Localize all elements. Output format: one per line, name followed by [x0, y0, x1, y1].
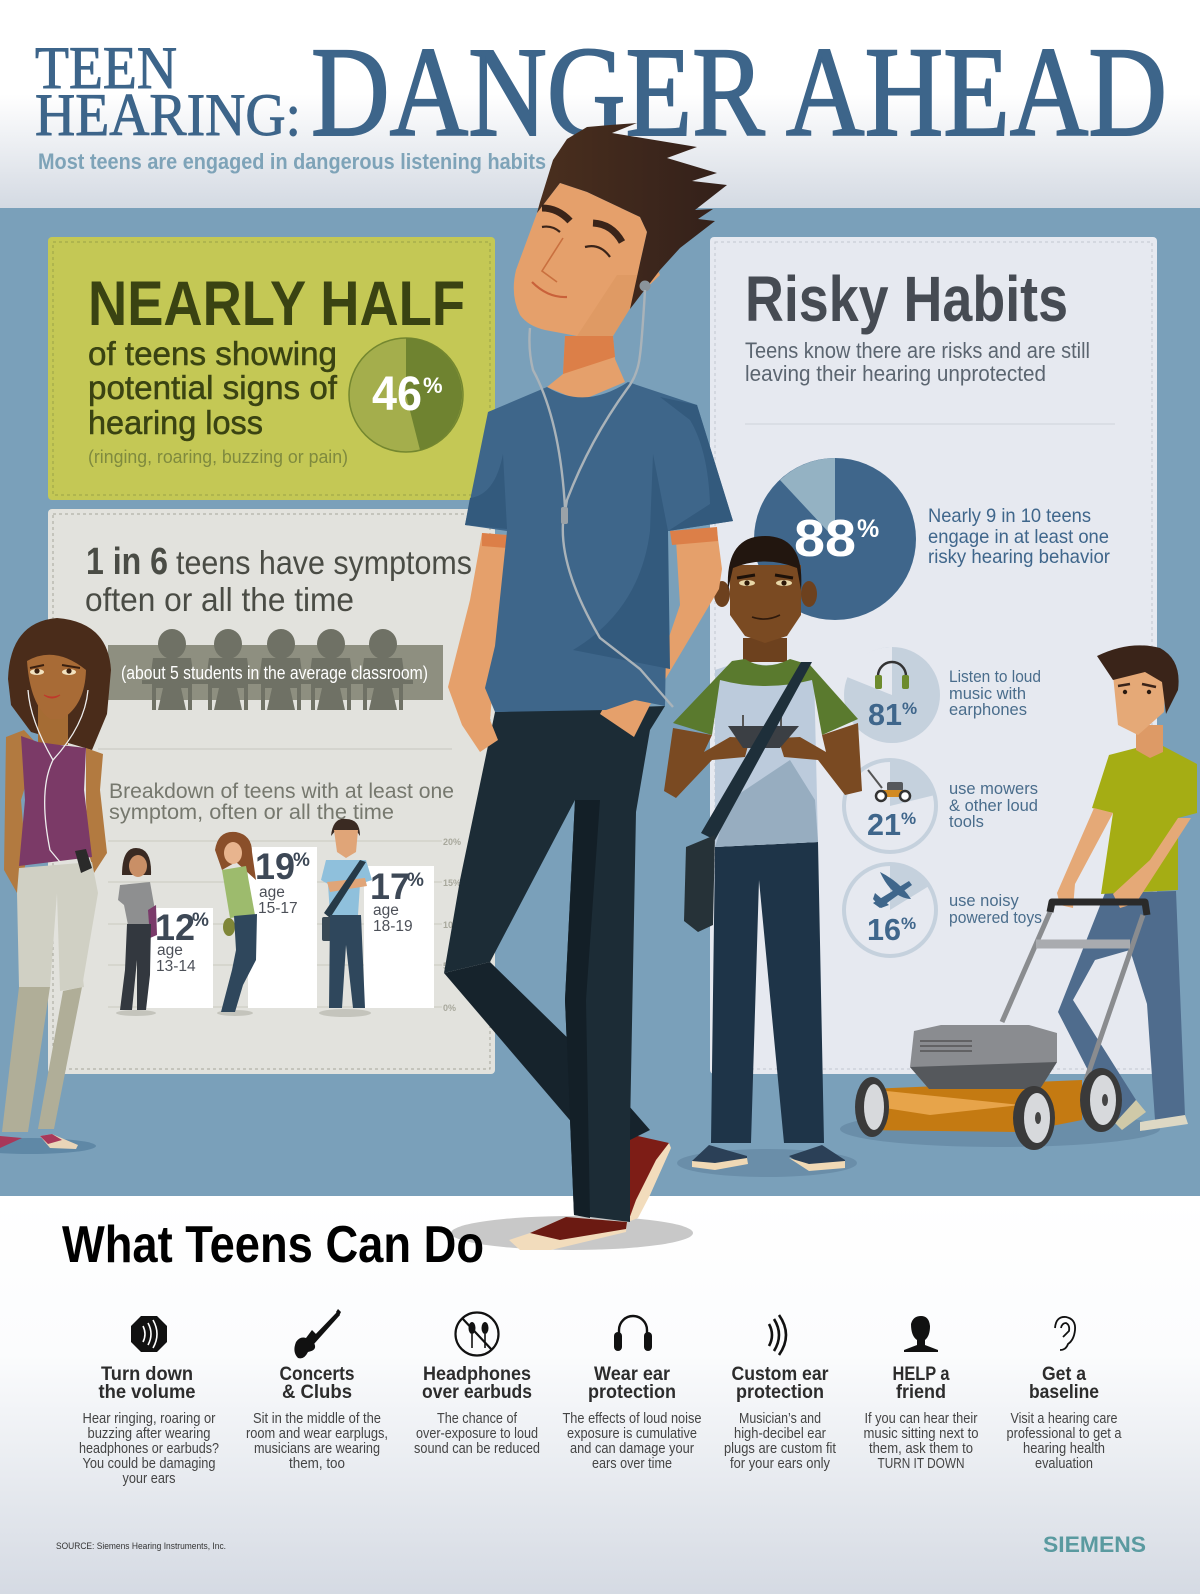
figure: girl 15-17 — [215, 832, 257, 1016]
pie chart: 46%: 46 — [372, 368, 422, 421]
figure: boy 18-19 — [319, 819, 372, 1017]
tip: get a baseline: hearing health — [1023, 1441, 1105, 1457]
bar: age 13-14: 13-14 — [156, 958, 196, 975]
pie chart: 46%: % — [423, 373, 443, 398]
tip: concerts and clubs: musicians are wearing — [254, 1441, 380, 1457]
tip: help a friend: If you can hear their — [864, 1411, 978, 1427]
icon: ear — [1055, 1317, 1075, 1350]
bar: age 15-17: % — [293, 850, 310, 871]
text: risky habits intro: leaving their hearing unprotected — [745, 361, 1046, 386]
stat: 16% toys: 16 — [867, 912, 901, 947]
bar: age 18-19 — [364, 866, 434, 1008]
tip: custom ear protection: plugs are custom fit — [724, 1441, 836, 1457]
stat: 21% mowers: tools — [949, 813, 984, 831]
bar: age 18-19: age — [373, 902, 399, 919]
heading: risky habits: Risky Habits — [745, 263, 1068, 335]
tip: help a friend: them, ask them to — [869, 1441, 973, 1457]
tip: concerts and clubs: & Clubs — [282, 1381, 352, 1403]
text: signs of hearing loss: of teens showing — [88, 335, 337, 372]
title: TEEN — [35, 35, 177, 101]
tip: custom ear protection: high-decibel ear — [734, 1426, 826, 1442]
bar: age 15-17: 19 — [255, 846, 295, 887]
tip: wear ear protection: protection — [588, 1381, 676, 1403]
tip: custom ear protection: protection — [736, 1381, 824, 1403]
tip: turn down the volume: You could be damaging — [82, 1456, 216, 1472]
panel: nearly half — [48, 237, 495, 500]
tip: get a baseline: baseline — [1029, 1381, 1099, 1403]
band: classroom note: (about 5 students in the average classroom) — [121, 663, 428, 683]
icon: headphones — [875, 662, 909, 689]
stat: 21% mowers: use mowers — [949, 780, 1038, 798]
heading: what teens can do: What Teens Can Do — [62, 1216, 484, 1274]
character: main boy with earphones — [444, 123, 733, 1250]
text: risky habits intro — [745, 338, 1090, 386]
tip: help a friend — [864, 1316, 978, 1472]
pie chart: 88%: 88 — [794, 510, 856, 568]
tip: turn down the volume: Turn down — [101, 1363, 193, 1385]
tip: get a baseline: Get a — [1042, 1363, 1086, 1385]
text: breakdown heading — [109, 780, 454, 824]
neck — [547, 336, 625, 401]
lawn mower — [855, 902, 1147, 1150]
bar chart: symptoms by age: 5% — [443, 961, 456, 971]
text: nearly 9 in 10: Nearly 9 in 10 teens — [928, 505, 1091, 527]
bar: age 13-14 — [145, 907, 213, 1008]
tip: wear ear protection — [562, 1316, 702, 1472]
icon: sound waves — [769, 1315, 786, 1355]
tip: help a friend: friend — [896, 1381, 946, 1403]
bar: age 18-19: 18-19 — [373, 918, 413, 935]
title: HEARING: — [35, 82, 301, 148]
text: symptoms note: (ringing, roaring, buzzing or pain) — [88, 447, 348, 467]
tip: concerts and clubs: them, too — [289, 1456, 345, 1472]
bar chart: symptoms by age: 10% — [443, 920, 461, 930]
earphone cord — [529, 290, 673, 707]
tip: wear ear protection: and can damage your — [570, 1441, 694, 1457]
icon: headphones — [614, 1316, 652, 1351]
bar chart: symptoms by age: 0% — [443, 1003, 456, 1013]
tip: custom ear protection: for your ears only — [730, 1456, 831, 1472]
stat: 21% mowers: & other loud — [949, 797, 1038, 815]
character: boy with lawn mower — [840, 645, 1197, 1150]
tip: get a baseline — [1006, 1317, 1122, 1472]
tip: concerts and clubs — [246, 1309, 388, 1472]
text: signs of hearing loss — [88, 335, 338, 441]
tip: custom ear protection — [724, 1315, 836, 1472]
icon: no earbuds — [456, 1312, 498, 1356]
tip: wear ear protection: Wear ear — [594, 1363, 670, 1385]
stat: 16% toys: % — [901, 914, 916, 933]
heading: 1 in 6 teens: teens have symptoms — [176, 544, 472, 581]
band: classroom note — [108, 629, 443, 710]
icon: toy plane — [873, 872, 912, 908]
stat: 81% earphones: music with — [949, 685, 1026, 703]
tip: headphones over earbuds: Headphones — [423, 1363, 531, 1385]
tip: get a baseline: Visit a hearing care — [1010, 1411, 1118, 1427]
heading: 1 in 6 teens: often or all the time — [85, 581, 354, 618]
stat: 81% earphones: % — [902, 699, 917, 718]
tip: turn down the volume — [79, 1316, 219, 1487]
pie chart: 46% — [349, 338, 463, 452]
stat: 81% earphones: 81 — [868, 697, 902, 732]
figure: girl 13-14 — [116, 848, 157, 1016]
stat: 21% mowers: 21 — [867, 807, 901, 842]
tip: wear ear protection: exposure is cumulative — [567, 1426, 697, 1442]
stat: 21% mowers — [844, 760, 1038, 852]
bar: age 13-14: % — [192, 910, 209, 931]
tip: help a friend: music sitting next to — [864, 1426, 978, 1442]
tip: get a baseline: professional to get a — [1006, 1426, 1122, 1442]
text: nearly 9 in 10: risky hearing behavior — [928, 546, 1110, 568]
tip: custom ear protection: Musician’s and — [739, 1411, 821, 1427]
source note: SOURCE: Siemens Hearing Instruments, Inc. — [56, 1541, 226, 1552]
tip: headphones over earbuds: The chance of — [437, 1411, 518, 1427]
tip: help a friend: TURN IT DOWN — [878, 1456, 964, 1472]
icon: volume octagon — [131, 1316, 167, 1352]
back shoe — [628, 1134, 669, 1218]
subtitle: Most teens are engaged in dangerous listening habits — [38, 149, 546, 174]
text: signs of hearing loss: hearing loss — [88, 404, 263, 441]
heading: nearly half: NEARLY HALF — [88, 269, 465, 339]
bar chart: symptoms by age: 20% — [443, 837, 461, 847]
front shoe — [509, 1217, 627, 1250]
face — [514, 183, 660, 336]
tip: concerts and clubs: Sit in the middle of the — [253, 1411, 381, 1427]
t-shirt — [465, 382, 733, 712]
face details — [542, 208, 570, 221]
heading: 1 in 6 teens: 1 in 6 — [86, 541, 168, 583]
text: nearly 9 in 10: engage in at least one — [928, 526, 1109, 548]
stat: 16% toys — [844, 864, 1042, 956]
bar: age 18-19: 17 — [370, 866, 410, 907]
tip: turn down the volume: the volume — [98, 1381, 196, 1403]
text: breakdown heading: symptom, often or all the time — [109, 801, 394, 824]
tip: headphones over earbuds — [414, 1312, 540, 1457]
bar: age 15-17: 15-17 — [258, 900, 298, 917]
panel: risky habits — [710, 237, 1157, 1074]
bar: age 13-14: age — [157, 942, 183, 959]
text: risky habits intro: Teens know there are risks and are still — [745, 338, 1090, 363]
stat: 16% toys: use noisy — [949, 892, 1019, 910]
logo: Siemens: SIEMENS — [1043, 1532, 1146, 1557]
bar: age 18-19: % — [407, 870, 424, 891]
icon: guitar — [294, 1309, 341, 1358]
stat: 81% earphones — [844, 647, 1041, 743]
pie chart: 88%: % — [857, 515, 879, 543]
tip: headphones over earbuds: over-exposure to loud — [416, 1426, 538, 1442]
tip: headphones over earbuds: over earbuds — [422, 1381, 532, 1403]
tip: custom ear protection: Custom ear — [732, 1363, 829, 1385]
silhouettes: classroom students — [142, 629, 413, 710]
tip: headphones over earbuds: sound can be reduced — [414, 1441, 540, 1457]
arms — [448, 533, 510, 752]
bar chart: symptoms by age — [108, 837, 461, 1013]
panel: 1 in 6 — [48, 509, 495, 1074]
stat: 81% earphones: earphones — [949, 701, 1027, 719]
tip: turn down the volume: buzzing after wearing — [88, 1426, 210, 1442]
tip: help a friend: HELP a — [892, 1363, 950, 1385]
tip: concerts and clubs: Concerts — [280, 1363, 355, 1385]
stat: 16% toys: powered toys — [949, 909, 1042, 927]
tip: wear ear protection: The effects of loud noise — [562, 1411, 702, 1427]
bar: age 15-17 — [248, 846, 317, 1008]
tip: turn down the volume: headphones or earbuds? — [79, 1441, 219, 1457]
text: signs of hearing loss: potential signs of — [88, 369, 338, 406]
back lower leg — [444, 962, 650, 1140]
pie chart: 88% — [754, 458, 916, 620]
character: girl with phone — [0, 618, 111, 1154]
tip: turn down the volume: your ears — [122, 1471, 176, 1487]
tip: turn down the volume: Hear ringing, roaring or — [82, 1411, 216, 1427]
icon: person — [904, 1316, 938, 1352]
bar: age 13-14: 12 — [155, 907, 195, 948]
tip: concerts and clubs: room and wear earplugs, — [246, 1426, 388, 1442]
tip: wear ear protection: ears over time — [592, 1456, 672, 1472]
tip: get a baseline: evaluation — [1035, 1456, 1093, 1472]
jeans — [444, 706, 665, 1222]
bar: age 15-17: age — [259, 884, 285, 901]
hair — [537, 123, 727, 309]
icon: small mower — [868, 770, 910, 801]
stat: 81% earphones: Listen to loud — [949, 668, 1041, 686]
heading: 1 in 6 teens — [85, 541, 472, 618]
character: boy with controller — [664, 536, 862, 1177]
text: breakdown heading: Breakdown of teens with at least one — [109, 780, 454, 803]
stat: 21% mowers: % — [901, 809, 916, 828]
text: nearly 9 in 10 — [928, 505, 1110, 568]
bar chart: symptoms by age: 15% — [443, 878, 461, 888]
